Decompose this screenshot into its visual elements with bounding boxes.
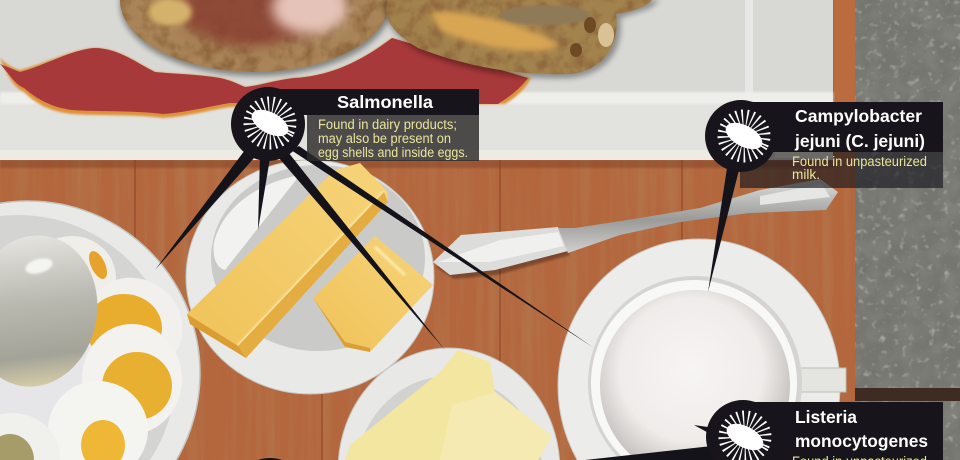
fried food: [120, 0, 660, 78]
milk cup and saucer: [558, 239, 846, 460]
small cheese wedge: [313, 236, 433, 352]
description: milk.: [792, 167, 820, 182]
cheese plate: [186, 160, 434, 394]
label background: [280, 89, 479, 161]
description: egg shells and inside eggs.: [318, 145, 468, 160]
white serving tray: [0, 0, 833, 160]
large cheese slab: [187, 163, 388, 358]
whole peeled egg: [0, 225, 109, 397]
egg slice 2: [82, 324, 182, 434]
label background: [740, 102, 943, 188]
plate of eggs: [0, 201, 201, 460]
title: Campylobacter: [795, 106, 922, 126]
egg slice 1: [67, 259, 201, 391]
knife: [433, 179, 838, 279]
butter plate: [338, 348, 560, 460]
description: may also be present on: [318, 131, 451, 146]
pointer lines: [585, 425, 735, 460]
egg half, back: [28, 236, 116, 320]
red sauce: [0, 38, 531, 118]
next pin head, cropped at bottom: [232, 458, 308, 460]
callout: Listeria: [585, 400, 943, 460]
pointer lines: [155, 146, 594, 350]
label background: [745, 402, 943, 460]
title: jejuni (C. jejuni): [794, 131, 925, 151]
description: Found in unpasteurized: [792, 154, 927, 169]
title: Listeria: [795, 407, 857, 427]
callout: Salmonella: [155, 87, 594, 350]
stone ground: [855, 0, 960, 460]
pin head with bacterium icon: [231, 87, 305, 161]
callout: Campylobacter: [705, 100, 943, 292]
description: Found in dairy products;: [318, 117, 457, 132]
egg slice 3: [48, 381, 148, 460]
title: Salmonella: [337, 92, 433, 112]
title: monocytogenes: [795, 431, 928, 451]
pin head with bacterium icon: [706, 400, 780, 460]
pointer line: [708, 168, 739, 292]
egg slice 4: [0, 413, 60, 460]
pin head with bacterium icon: [705, 100, 777, 172]
